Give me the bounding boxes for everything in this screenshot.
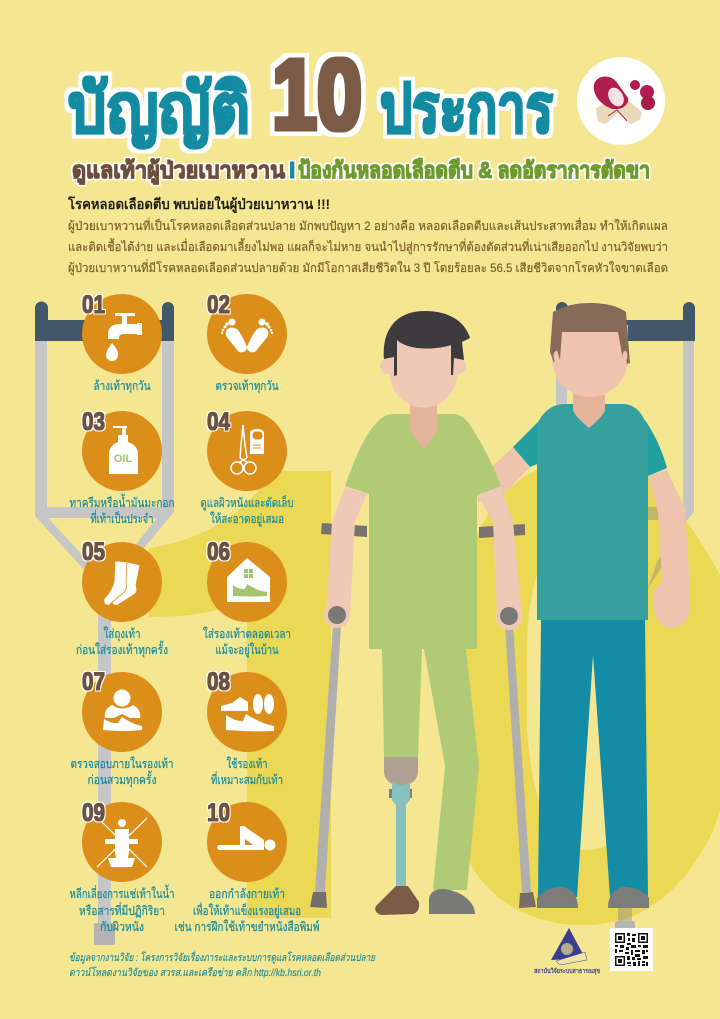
step 09: หรือสารที่มีปฏิกิริยา bbox=[79, 902, 165, 918]
ears bbox=[554, 351, 558, 361]
icon: scissors and nail bbox=[231, 425, 264, 474]
figure: man with crutches and prosthetic leg bbox=[310, 311, 536, 915]
green shirt bbox=[345, 414, 501, 649]
logo: HSRI: สถาบันวิจัยระบบสาธารณสุข bbox=[534, 967, 600, 975]
step 08 bbox=[207, 668, 287, 787]
step 10: 10 bbox=[207, 799, 230, 827]
intro heading: โรคหลอดเลือดตีบ พบบ่อยในผู้ป่วยเบาหวาน !!! bbox=[67, 195, 330, 213]
step 07 bbox=[70, 668, 174, 788]
right arm bbox=[648, 470, 690, 628]
source note: ข้อมูลจากงานวิจัย : โครงการวิจัยเรื่องภาระและระบบการดูแลโรคหลอดเลือดส่วนปลาย bbox=[69, 950, 376, 964]
hair bbox=[384, 311, 470, 376]
icon: person checking shoe bbox=[103, 690, 142, 731]
step 03: ที่เท้าเป็นประจำ bbox=[90, 510, 154, 526]
intro paragraph: ผู้ป่วยเบาหวานที่มีโรคหลอดเลือดส่วนปลายด้วย มักมีโอกาสเสียชีวิตใน 3 ปี โดยร้อยละ 56.5 เสียชีวิตจากโรคหัวใจขาดเลือด bbox=[68, 259, 668, 276]
step 04 bbox=[200, 408, 294, 527]
step 06: 06 bbox=[207, 538, 230, 566]
step 02: 02 bbox=[207, 291, 230, 319]
step 05: 05 bbox=[82, 538, 105, 566]
step 06 bbox=[203, 538, 291, 658]
face bbox=[552, 325, 628, 397]
left crutch bbox=[35, 302, 174, 945]
title: 10 bbox=[272, 39, 362, 151]
arms bbox=[324, 487, 522, 630]
intro paragraph bbox=[68, 217, 668, 276]
intro paragraph: และติดเชื้อได้ง่าย และเมื่อเลือดมาเลี้ยงไม่พอ แผลก็จะไม่หาย จนนำไปสู่การรักษาที่ต้องตัดส่วนที่เน่าเสียออกไป งานวิจัยพบว่า bbox=[68, 238, 668, 255]
icon: footwear bbox=[221, 694, 274, 731]
step 05 bbox=[76, 538, 168, 658]
background big number 10 bbox=[149, 457, 720, 925]
icon: feet bbox=[221, 318, 273, 352]
step 01 bbox=[82, 291, 162, 394]
subtitle bbox=[72, 157, 650, 185]
neck bbox=[573, 385, 605, 428]
hair bbox=[550, 303, 630, 364]
title: บัญญัติ bbox=[68, 71, 250, 149]
trousers bbox=[538, 620, 648, 897]
step 08: 08 bbox=[207, 668, 230, 696]
ears bbox=[380, 358, 396, 374]
icon: no foot soaking bbox=[97, 818, 147, 867]
crutch feet bbox=[310, 892, 536, 908]
shoes bbox=[537, 887, 649, 908]
subtitle: I bbox=[289, 157, 295, 183]
sleeve bbox=[513, 418, 542, 467]
step 03 bbox=[70, 408, 174, 526]
face bbox=[390, 340, 457, 408]
step 06: แม้จะอยู่ในบ้าน bbox=[216, 643, 279, 658]
figure: helper man bbox=[513, 303, 690, 908]
step 07: 07 bbox=[82, 668, 105, 696]
step 04: ดูแลผิวหนังและตัดเล็บ bbox=[200, 495, 294, 511]
step 03: OIL bbox=[114, 453, 132, 465]
step 10: เพื่อให้เท้าแข็งแรงอยู่เสมอ bbox=[193, 902, 301, 919]
logo: HSRI bbox=[534, 928, 600, 975]
step 03: 03 bbox=[82, 408, 105, 436]
step 09: 09 bbox=[82, 799, 105, 827]
step 04: ให้สะอาดอยู่เสมอ bbox=[210, 512, 284, 527]
teal shirt bbox=[537, 404, 648, 620]
step 10: ออกกำลังกายเท้า bbox=[209, 887, 285, 901]
QR code bbox=[610, 928, 653, 971]
icon: oil bottle bbox=[109, 426, 138, 474]
title bbox=[68, 39, 553, 151]
title: ประการ bbox=[380, 71, 553, 147]
icon: foot exercise bbox=[217, 826, 276, 850]
helper arm around shoulder bbox=[478, 447, 530, 503]
icon: faucet bbox=[106, 313, 142, 361]
step 05: ใส่ถุงเท้า bbox=[104, 627, 140, 642]
right crutch bbox=[556, 302, 695, 930]
step 09: กับผิวหนัง bbox=[100, 920, 144, 934]
step 03: ทาครีมหรือน้ำมันมะกอก bbox=[70, 493, 174, 510]
step 02 bbox=[207, 291, 287, 394]
source note bbox=[69, 950, 376, 979]
neck bbox=[410, 390, 437, 450]
step 06: ใส่รองเท้าตลอดเวลา bbox=[203, 627, 291, 641]
step 10: เช่น การฝึกใช้เท้าขยำหนังสือพิมพ์ bbox=[174, 920, 320, 934]
step 01: 01 bbox=[82, 291, 105, 319]
left leg prosthesis bbox=[375, 757, 419, 915]
crutch handles bbox=[321, 523, 525, 538]
subtitle: ป้องกันหลอดเลือดตีบ & ลดอัตราการตัดขา bbox=[298, 157, 650, 183]
step 08: ใช้รองเท้า bbox=[226, 757, 268, 771]
icon: house with shoe bbox=[227, 558, 270, 602]
intro paragraph: ผู้ป่วยเบาหวานที่เป็นโรคหลอดเลือดส่วนปลาย มักพบปัญหา 2 อย่างคือ หลอดเลือดตีบและเส้นประสาทเสื่อม ทำให้เกิดแผล bbox=[68, 217, 668, 234]
step 04: 04 bbox=[207, 408, 230, 436]
step 09: หลีกเลี่ยงการแช่เท้าในน้ำ bbox=[70, 884, 174, 901]
step 08: ที่เหมาะสมกับเท้า bbox=[211, 771, 283, 787]
icon: socks bbox=[104, 561, 140, 605]
green trousers bbox=[382, 649, 479, 890]
step 05: ก่อนใส่รองเท้าทุกครั้ง bbox=[76, 640, 168, 658]
step 01: ล้างเท้าทุกวัน bbox=[94, 379, 151, 394]
right shoe bbox=[429, 889, 475, 914]
crutch poles bbox=[315, 625, 531, 892]
subtitle: ดูแลเท้าผู้ป่วยเบาหวาน bbox=[72, 157, 285, 185]
source note: ดาวน์โหลดงานวิจัยของ สวรส.และเครือข่าย คลิก http://kb.hsri.or.th bbox=[69, 966, 321, 979]
icon: pills logo bbox=[577, 57, 665, 145]
step 10 bbox=[174, 799, 320, 934]
step 09 bbox=[70, 799, 174, 934]
step 02: ตรวจเท้าทุกวัน bbox=[216, 379, 279, 394]
step 07: ก่อนสวมทุกครั้ง bbox=[88, 770, 156, 788]
step 07: ตรวจสอบภายในรองเท้า bbox=[70, 757, 174, 771]
